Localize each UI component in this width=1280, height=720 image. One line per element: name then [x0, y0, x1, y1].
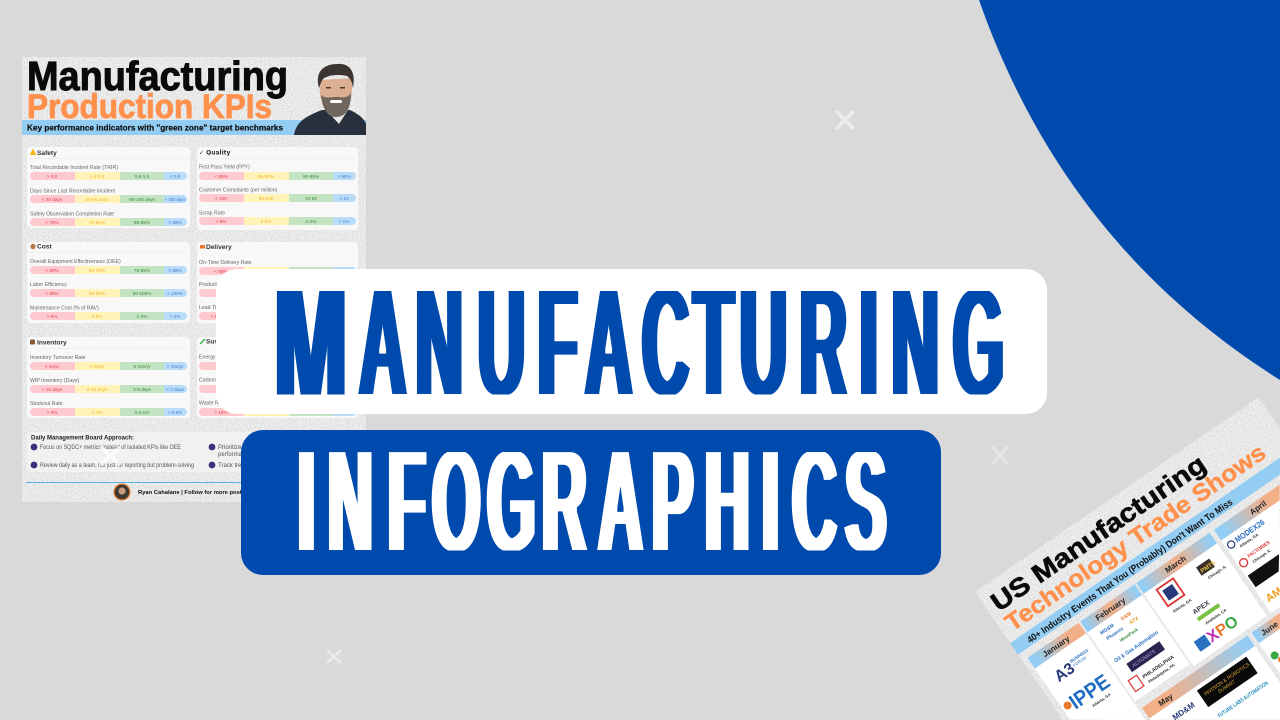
step 1: [31, 444, 181, 451]
row: labor efficiency: < 80%: [45, 291, 59, 296]
step 4: Track trends over time: [218, 463, 278, 469]
logo: PMTS: PMTS: [1200, 560, 1217, 575]
step 2: performance: [218, 452, 252, 458]
row: maintenance cost: 2-3%: [137, 314, 147, 319]
row: inventory turnover: > 10x/yr: [167, 364, 184, 369]
logo: ProMat box: Atlanta, GA: [1172, 597, 1193, 614]
title word: manufacturing: M: [274, 227, 347, 462]
row: stockout: [30, 401, 187, 416]
row: carbon: Carbon Footprint: [199, 378, 238, 384]
blue corner arc: [979, 0, 1280, 380]
row: on-time delivery: > 95%: [337, 269, 351, 274]
row: waste: Waste Recycling: [199, 400, 238, 406]
step 3: Review daily as a team, not just for reporting but problem-solving: [40, 463, 194, 469]
panel: daily management board: [27, 432, 358, 472]
heading: quality: ✓ Quality: [199, 150, 231, 156]
textured card background: [975, 397, 1280, 720]
row: inventory turnover: [30, 355, 187, 370]
column: January: [1028, 623, 1145, 720]
row: first pass yield: 85-90%: [258, 174, 274, 179]
row: production attainment: [199, 282, 356, 297]
logo: dark box: [1248, 554, 1280, 587]
heading: delivery: Delivery: [206, 244, 232, 251]
logos: MD&M and ATX: D&M: [1120, 611, 1133, 622]
panel: safety: [27, 147, 190, 228]
row: maintenance cost: Maintenance Cost (% of RAV): [30, 306, 99, 312]
logo: June show: [1269, 649, 1280, 666]
row: safety observation: < 70%: [45, 220, 59, 225]
step 2: [209, 444, 324, 458]
logo: Smart Factories: Chicago, IL: [1251, 547, 1272, 564]
subtitle band: [22, 120, 366, 135]
row: TRIR: 1.5-3.0: [90, 174, 105, 179]
logo: Oil and Gas: Oil & Gas Automation: [1114, 630, 1160, 664]
row: labor efficiency: 90-100%: [133, 291, 151, 296]
row: safety observation: 70-85%: [89, 220, 105, 225]
row: production attainment: Production Schedule Attainment: [199, 282, 273, 288]
row: WIP inventory: > 15 days: [42, 387, 63, 392]
column: April: April: [1248, 499, 1268, 517]
logos: MD&M and ATX: [1099, 609, 1140, 643]
row: inventory turnover: 6-10x/yr: [134, 364, 151, 369]
row: waste: [199, 400, 356, 416]
column: May: [1142, 635, 1280, 720]
step 2: Prioritize leading indicators over lagging: [218, 445, 324, 451]
row: days since incident: 90-180 days: [129, 197, 156, 202]
logo: invision robotics: INVISION & ROBOTICS: [1203, 661, 1252, 697]
step 1: Focus on SQDC+ metrics instead of isolated KPIs like OEE: [40, 445, 181, 451]
row: safety observation: 85-95%: [134, 220, 150, 225]
row: customer complaints: < 10: [339, 196, 349, 201]
infographic thumbnail: production KPIs: [22, 53, 366, 502]
logo: PMTS: Chicago, IL: [1207, 563, 1228, 580]
row: maintenance cost: 3-5%: [92, 314, 102, 319]
row: scrap rate: 2-5%: [261, 219, 271, 224]
logos: MD&M and ATX: ATX: [1129, 615, 1140, 626]
footer avatar: [114, 484, 130, 500]
title word: infographics: INFOGRAPHICS: [298, 419, 886, 585]
panel: inventory: [27, 337, 190, 418]
row: labor efficiency: 80-90%: [89, 291, 105, 296]
decorative cross right: [993, 448, 1007, 463]
row: first pass yield: < 85%: [214, 174, 228, 179]
row: first pass yield: > 95%: [337, 174, 351, 179]
infographic thumbnail: trade shows: [975, 397, 1280, 720]
subtitle band: Key performance indicators with "green zone" target benchmarks: [27, 124, 284, 132]
title line two: Technology Trade Shows: [1000, 439, 1271, 637]
row: maintenance cost: > 5%: [47, 314, 57, 319]
panel: sustainability: [197, 337, 358, 418]
row: stockout: Stockout Rate: [30, 401, 63, 407]
logo: Apex: Anaheim, CA: [1204, 607, 1227, 626]
column: January: January: [1041, 634, 1072, 659]
logos: MD&M and ATX: MD&M: [1099, 623, 1115, 637]
row: WIP inventory: [30, 378, 187, 393]
icon: money bag: [30, 244, 36, 249]
logo: A3: A3: [1052, 660, 1078, 686]
row: OEE: > 85%: [168, 268, 182, 273]
row: days since incident: > 180 days: [165, 197, 185, 202]
heading: safety: Safety: [37, 150, 57, 157]
row: energy: Energy Use: [199, 354, 226, 360]
white title pill: [216, 269, 1047, 414]
row: OEE: [30, 259, 187, 274]
row: customer complaints: > 100: [215, 196, 227, 201]
row: lead time: Lead Time: [199, 305, 223, 311]
row: first pass yield: First Pass Yield (FPY): [199, 164, 250, 170]
row: TRIR: > 3.0: [47, 174, 58, 179]
logo: MODEX: [1225, 517, 1270, 554]
row: on-time delivery: 90-95%: [303, 269, 319, 274]
row: safety observation: [30, 212, 187, 226]
icon: truck: [200, 245, 205, 248]
icon: warning: [30, 148, 36, 155]
row: on-time delivery: On-Time Delivery Rate: [199, 260, 252, 266]
row: first pass yield: [199, 164, 356, 180]
row: safety observation: Safety Observation Completion Rate: [30, 212, 114, 218]
subtitle band: 40+ Industry Events That You (Probably) Don't Want To Miss: [1025, 497, 1235, 646]
heading: cost: Cost: [37, 244, 52, 250]
row: WIP inventory: 9-15 days: [87, 387, 108, 392]
heading: inventory: Inventory: [37, 340, 67, 346]
row: WIP inventory: WIP Inventory (Days): [30, 378, 79, 384]
row: days since incident: Days Since Last Recordable Incident: [30, 188, 116, 194]
row: OEE: 60-75%: [89, 268, 105, 273]
column: February: [1080, 584, 1190, 702]
row: TRIR: Total Recordable Incident Rate (TRIR): [30, 165, 118, 171]
row: labor efficiency: Labor Efficiency: [30, 282, 67, 288]
row: energy: [199, 354, 356, 370]
logo: IPPE: Atlanta, GA: [1091, 692, 1112, 708]
row: maintenance cost: [30, 306, 187, 320]
row: lead time: > Industry: [211, 314, 232, 319]
column: February: February: [1094, 596, 1128, 623]
row: scrap rate: Scrap Rate: [199, 210, 225, 216]
logo: MODEX: Atlanta, GA: [1238, 532, 1259, 549]
column: March: March: [1163, 554, 1188, 575]
footer credit: Ryan Cahalane | Follow for more posts like this: [138, 490, 268, 496]
row: TRIR: 0.8-1.5: [135, 174, 150, 179]
title line one: US Manufacturing: [985, 449, 1211, 617]
row: OEE: < 60%: [45, 268, 59, 273]
column: June: June: [1259, 619, 1280, 638]
row: days since incident: [30, 188, 187, 203]
logo: Apex: [1192, 594, 1227, 628]
title word: manufacturing: ANUFACTURING: [359, 256, 1004, 430]
logo: invision robotics: [1197, 657, 1258, 707]
row: stockout: > 3%: [47, 410, 57, 415]
row: scrap rate: < 1%: [339, 219, 349, 224]
logo: XPO: XPO: [1204, 613, 1242, 646]
logo: A3: FORUM: [1072, 655, 1088, 668]
panel: delivery: [197, 242, 358, 323]
logo: Apex: APEX: [1192, 600, 1212, 616]
column: March: [1136, 533, 1267, 666]
logo: dark box: AUTOMATE: [1131, 648, 1158, 669]
row: labor efficiency: [30, 282, 187, 297]
logo: A3: [1052, 647, 1096, 686]
logo: MODEX: MODEX26: [1233, 517, 1267, 544]
row: customer complaints: Customer Complaints (per million): [199, 188, 278, 194]
row: OEE: 75-85%: [134, 268, 150, 273]
row: TRIR: [30, 165, 187, 180]
row: first pass yield: 90-95%: [303, 174, 319, 179]
column: May: May: [1157, 692, 1175, 708]
row: maintenance cost: < 2%: [170, 314, 180, 319]
row: inventory turnover: Inventory Turnover Rate: [30, 355, 86, 361]
title line one: Manufacturing: [27, 53, 288, 99]
logo: Philadelphia: Philadelphia, PA: [1147, 662, 1176, 684]
row: safety observation: > 95%: [168, 220, 182, 225]
row: OEE: Overall Equipment Effectiveness (OEE): [30, 259, 121, 265]
row: days since incident: 30-90 days: [85, 197, 109, 202]
row: scrap rate: 1-2%: [306, 219, 316, 224]
title line two: Production KPIs: [27, 88, 272, 126]
heading: sustainability: Sustainability: [206, 338, 249, 346]
decorative cross bottom: [328, 651, 340, 662]
row: customer complaints: 50-100: [259, 196, 274, 201]
logo: Philadelphia: PHILADELPHIA: [1141, 654, 1176, 680]
logo: IPPE: IPPE: [1065, 670, 1115, 714]
row: customer complaints: 10-50: [305, 196, 317, 201]
row: labor efficiency: > 100%: [167, 291, 183, 296]
row: WIP inventory: < 3 days: [166, 387, 185, 392]
row: waste: > 15%: [214, 410, 228, 415]
row: stockout: 1-3%: [92, 410, 102, 415]
row: inventory turnover: 4-6x/yr: [90, 364, 105, 369]
footer rule: [26, 482, 362, 483]
subtitle band: [1010, 448, 1280, 655]
logos: MD&M and ATX: Phoenix: [1105, 626, 1125, 642]
row: on-time delivery: 85-90%: [258, 269, 274, 274]
row: scrap rate: [199, 210, 356, 225]
heading: daily management: Daily Management Board Approach:: [31, 434, 134, 442]
row: WIP inventory: 3-9 days: [133, 387, 152, 392]
logo: invision robotics: SUMMIT: [1217, 679, 1237, 695]
logo: Smart Factories: [1238, 540, 1275, 571]
logo: PMTS: [1196, 553, 1228, 582]
logo: A3: BUSINESS: [1069, 647, 1090, 664]
row: on-time delivery: [199, 260, 356, 275]
step 4: [209, 462, 278, 469]
row: customer complaints: [199, 188, 356, 202]
logo: WestPack: WestPack: [1119, 627, 1139, 643]
title word: manufacturing: [276, 291, 1003, 394]
column: April: [1214, 485, 1280, 613]
row: stockout: < 0.5%: [168, 410, 182, 415]
blue title pill: [241, 430, 941, 575]
logo: Philadelphia: [1128, 652, 1179, 693]
panel: cost: [27, 242, 190, 323]
column: June: [1252, 613, 1280, 674]
textured card background: [22, 57, 366, 502]
row: lead time: [199, 305, 356, 320]
row: stockout: 0.5-1%: [135, 410, 149, 415]
row: TRIR: < 0.8: [170, 174, 181, 179]
icon: sprout: [200, 339, 205, 344]
author portrait: [294, 64, 366, 135]
panel: quality: [197, 147, 358, 230]
row: days since incident: < 30 days: [42, 197, 63, 202]
row: carbon: [199, 378, 356, 393]
row: on-time delivery: < 85%: [214, 269, 228, 274]
icon: box: [30, 340, 35, 344]
faint cross on card: [102, 448, 119, 464]
logo: Smart Factories: FACTORIES: [1247, 540, 1272, 560]
row: inventory turnover: < 4x/yr: [45, 364, 60, 369]
row: scrap rate: > 5%: [216, 219, 226, 224]
decorative cross top: [837, 112, 853, 128]
